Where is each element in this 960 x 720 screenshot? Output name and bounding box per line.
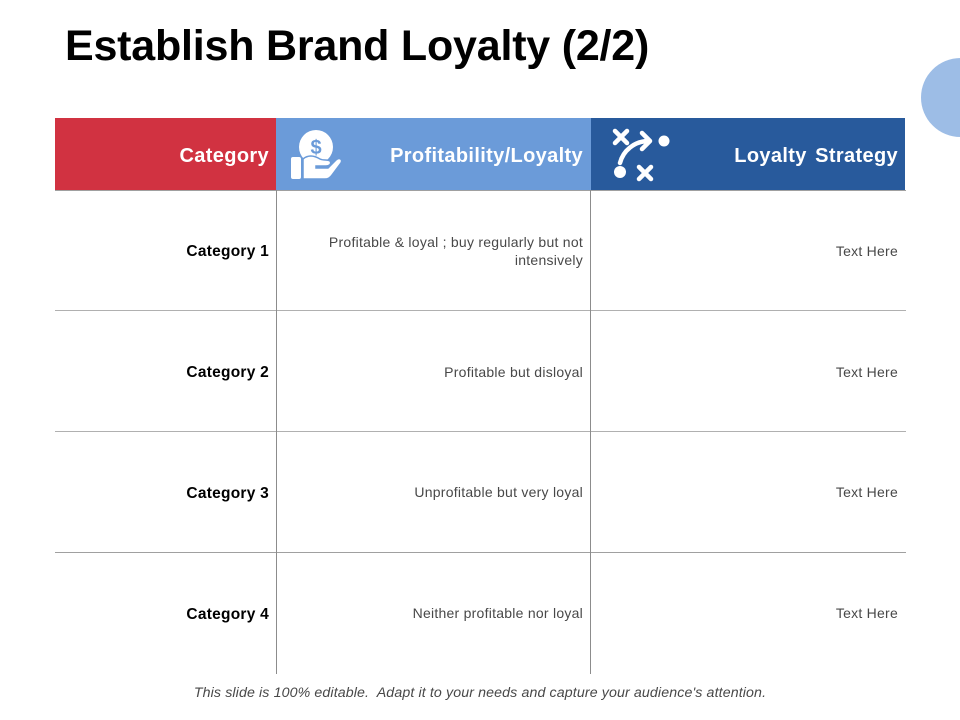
footer note: This slide is 100% editable. Adapt it to your needs and capture your audience's attention. [194, 685, 766, 701]
profitability text 1: intensively [515, 252, 583, 268]
strategy text 4: Text Here [836, 605, 898, 621]
profitability text 3: Unprofitable but very loyal [414, 484, 583, 500]
header: strategy: Loyalty Strategy [734, 144, 898, 166]
category label 1: Category 1 [186, 243, 269, 260]
header: category: Category [180, 144, 269, 166]
profitability text 1: Profitable & loyal ; buy regularly but not [329, 234, 583, 250]
strategy text 1: Text Here [836, 243, 898, 259]
row 1 [186, 234, 898, 268]
strategy text 3: Text Here [836, 484, 898, 500]
icon: hand holding coin [291, 130, 341, 179]
row 3 [186, 484, 898, 502]
row 2 [186, 364, 898, 381]
profitability text 2: Profitable but disloyal [444, 364, 583, 380]
row 4 [186, 605, 898, 623]
title: Establish Brand Loyalty (2/2) [65, 22, 649, 70]
category label 4: Category 4 [186, 606, 269, 623]
icon: hand holding coin: $ [310, 137, 322, 159]
category label 3: Category 3 [186, 485, 269, 502]
strategy text 2: Text Here [836, 364, 898, 380]
icon: playbook [612, 128, 670, 182]
header: category [55, 118, 276, 190]
header: strategy [591, 118, 905, 190]
header: profitability: Profitability/Loyalty [390, 144, 583, 166]
profitability text 1 [329, 234, 583, 268]
decorative circle [921, 58, 960, 137]
category label 2: Category 2 [186, 364, 269, 381]
row dividers [55, 190, 906, 191]
profitability text 4: Neither profitable nor loyal [413, 605, 583, 621]
header: profitability [276, 118, 591, 190]
